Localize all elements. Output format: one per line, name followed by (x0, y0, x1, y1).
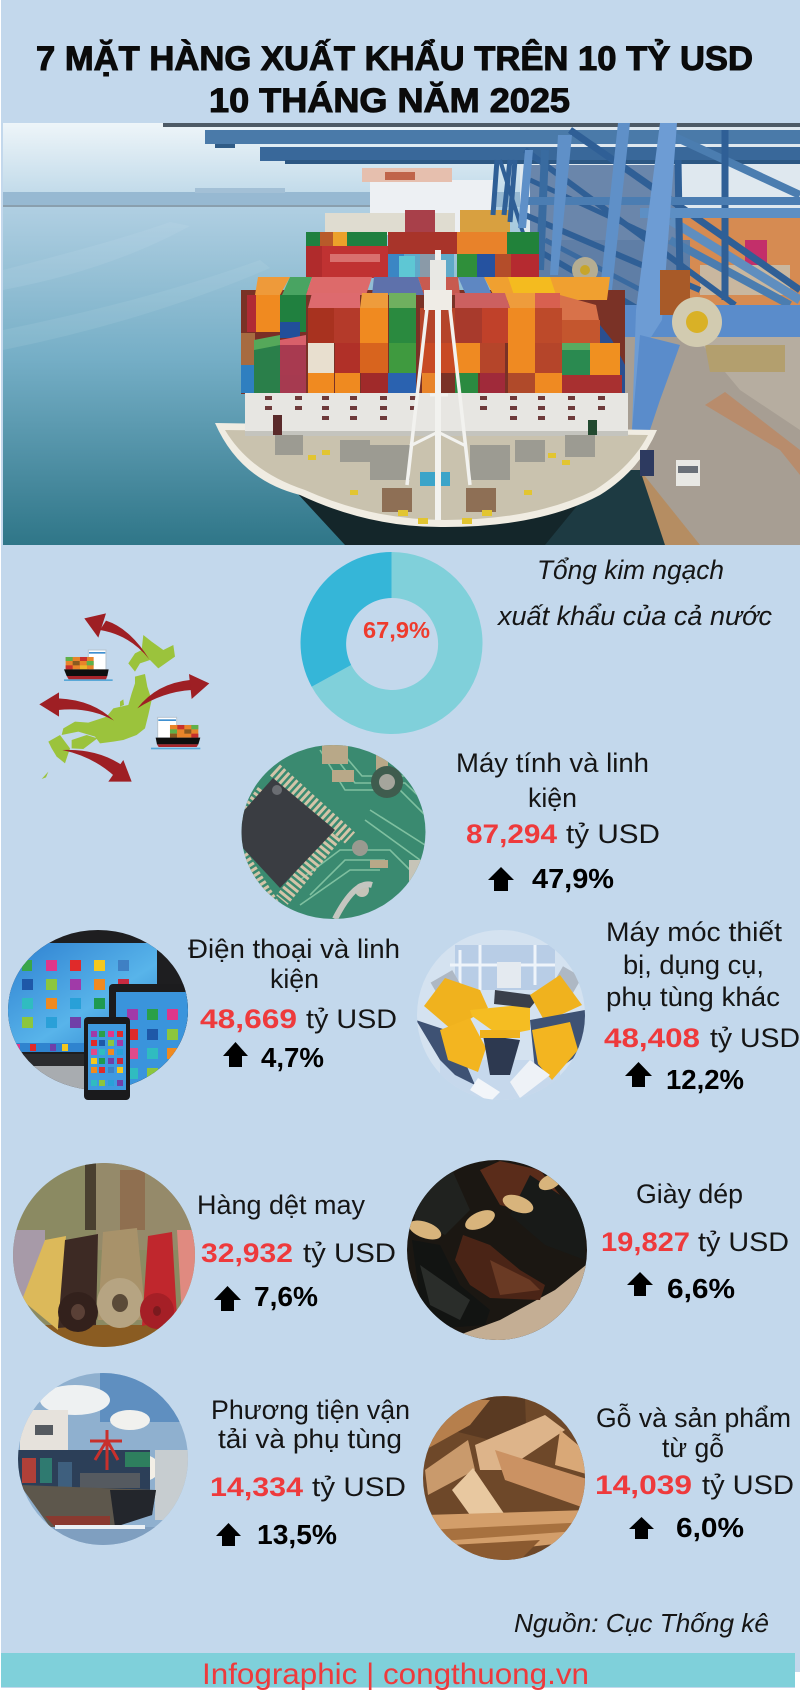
icon: up arrow (629, 1517, 654, 1539)
panel: computers and components (240, 742, 660, 920)
photo: yellow robots (415, 928, 587, 1103)
item label: từ gỗ (662, 1432, 724, 1463)
item label: Máy tính và linh (456, 748, 649, 778)
donut chart (301, 552, 483, 734)
source note: Nguồn: Cục Thống kê (514, 1608, 769, 1638)
value: 87,294 (466, 819, 557, 849)
value: tỷ USD (702, 1470, 794, 1500)
title (36, 40, 753, 120)
value (466, 819, 660, 849)
white superstructure (370, 180, 495, 235)
value: 14,334 (210, 1472, 303, 1502)
value: tỷ USD (566, 819, 660, 849)
truck (676, 460, 700, 486)
port quay (625, 337, 800, 545)
footer text: Infographic | congthuong.vn (202, 1658, 589, 1691)
item label: phụ tùng khác (606, 982, 780, 1012)
panel: wood and wood products (420, 1393, 794, 1563)
value: tỷ USD (698, 1227, 789, 1257)
item label: tải và phụ tùng (218, 1424, 402, 1454)
cranes (163, 123, 800, 127)
item label: Phương tiện vận (211, 1395, 410, 1425)
item label: Máy móc thiết (606, 917, 783, 947)
main container stack (241, 290, 625, 394)
value: 19,827 (601, 1227, 690, 1257)
icon: up arrow (223, 1042, 248, 1067)
icon: Japan export map (39, 613, 209, 782)
deck machinery (275, 435, 595, 480)
mast (407, 250, 470, 520)
value (604, 1023, 800, 1053)
value: 14,039 (595, 1470, 692, 1500)
item label (606, 917, 783, 1012)
icon: up arrow (216, 1523, 241, 1546)
donut caption: xuất khẩu của cả nước (496, 601, 772, 631)
icon: up arrow (488, 867, 514, 891)
value (200, 1004, 397, 1034)
value: tỷ USD (312, 1472, 406, 1502)
background right (520, 127, 800, 232)
growth: 47,9% (532, 863, 614, 894)
value: 48,408 (604, 1023, 700, 1053)
value (210, 1472, 406, 1502)
growth: 6,0% (676, 1512, 744, 1543)
photo: leather shoes (405, 1158, 589, 1342)
photo: tablets and phone (5, 928, 199, 1100)
donut caption: Tổng kim ngạch (537, 555, 724, 585)
hull and deck (298, 494, 577, 545)
item label (211, 1395, 410, 1454)
hero photo: container ship at port (3, 123, 800, 545)
panel: textiles (10, 1160, 396, 1350)
icon: up arrow (627, 1272, 653, 1296)
icon: up arrow (214, 1286, 241, 1311)
donut value: 67,9% (363, 617, 430, 643)
growth: 4,7% (261, 1042, 324, 1073)
item label (596, 1402, 791, 1463)
item label: Hàng dệt may (197, 1190, 365, 1220)
footer bar (1, 1653, 795, 1691)
value: tỷ USD (306, 1004, 397, 1034)
photo: fabric rolls (10, 1160, 200, 1350)
panel: vehicles and parts (15, 1370, 410, 1552)
growth: 13,5% (257, 1519, 337, 1550)
upper containers (306, 232, 320, 246)
panel: computers and components: kiện (528, 783, 577, 813)
photo: circuit board (240, 742, 430, 920)
item label: bị, dụng cụ, (623, 950, 764, 980)
value: 48,669 (200, 1004, 297, 1034)
value (595, 1470, 794, 1500)
value: tỷ USD (710, 1023, 800, 1053)
item label: Điện thoại và linh (188, 934, 400, 964)
photo: cargo ship (15, 1370, 191, 1552)
value (601, 1227, 789, 1257)
value: 32,932 (201, 1238, 293, 1268)
growth: 6,6% (667, 1273, 735, 1304)
title: 10 THÁNG NĂM 2025 (209, 82, 570, 120)
icon: up arrow (625, 1062, 652, 1087)
item label: Gỗ và sản phẩm (596, 1402, 791, 1433)
donut caption (496, 555, 772, 631)
title: 7 MẶT HÀNG XUẤT KHẨU TRÊN 10 TỶ USD (36, 40, 753, 78)
growth: 7,6% (254, 1281, 318, 1312)
panel: phones and components: kiện (270, 964, 319, 994)
growth: 12,2% (666, 1064, 744, 1095)
panel: machinery and equipment (415, 917, 800, 1103)
item label: Giày dép (636, 1179, 743, 1209)
panel: footwear (405, 1158, 789, 1342)
panel: phones and components (5, 928, 400, 1100)
value (201, 1238, 396, 1268)
photo: split wood (420, 1393, 590, 1563)
value: tỷ USD (303, 1238, 396, 1268)
